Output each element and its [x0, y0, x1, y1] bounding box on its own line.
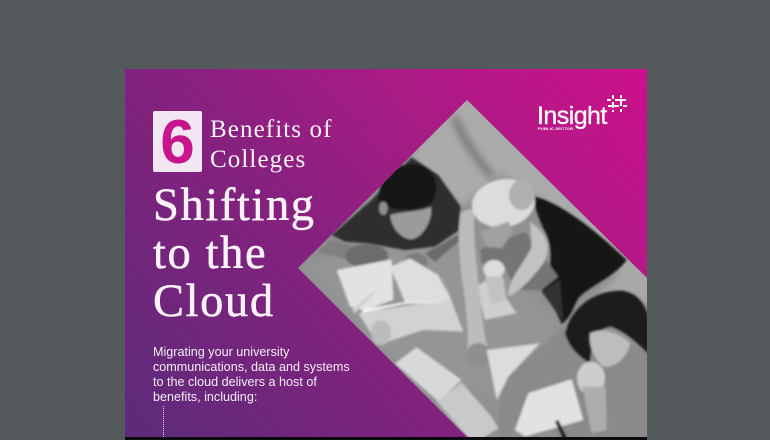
blonde woman's arm — [459, 209, 490, 357]
number badge — [153, 111, 202, 172]
lower woman's hair — [565, 291, 650, 363]
heading: Benefits of Colleges: Benefits of — [210, 116, 332, 143]
lower woman's face — [590, 331, 630, 367]
title: Shifting to the Cloud: Cloud — [153, 276, 275, 327]
panel: purple gradient card — [125, 69, 647, 437]
man's hair — [378, 164, 436, 210]
logo mark — [607, 95, 627, 112]
open books — [337, 259, 393, 311]
title: Shifting to the Cloud — [153, 180, 316, 327]
intro text: to the cloud delivers a host of — [153, 375, 317, 389]
intro text: benefits, including: — [153, 390, 257, 404]
heading: Benefits of Colleges: Colleges — [210, 146, 306, 173]
small notebook — [477, 277, 517, 320]
blonde woman's blouse — [480, 232, 558, 290]
floor — [409, 100, 644, 276]
dotted connector line — [163, 406, 164, 437]
man's shirt — [332, 157, 461, 250]
table — [385, 179, 616, 250]
numeral 6: 6 — [160, 108, 195, 177]
title: Shifting to the Cloud: Shifting — [153, 180, 316, 231]
man's face — [390, 207, 431, 239]
lower woman's sweater — [498, 327, 655, 440]
blonde woman's face — [480, 222, 513, 248]
blonde woman's hand — [483, 260, 505, 279]
logo: Insight Public Sector — [537, 95, 627, 131]
photo: students studying in diamond crop — [298, 100, 647, 437]
man's arms and hands — [318, 240, 351, 259]
heading: Benefits of Colleges — [210, 116, 332, 173]
woman's dark top — [535, 197, 627, 324]
title: Shifting to the Cloud: to the — [153, 228, 267, 279]
logo sub-label: PUBLIC SECTOR — [538, 126, 573, 131]
intro text: Migrating your university — [153, 345, 289, 359]
lower woman's hand and forearm — [577, 362, 605, 395]
page beneath lower woman — [487, 343, 540, 400]
intro text — [153, 345, 350, 404]
pen — [555, 420, 568, 440]
black strip below card — [125, 437, 647, 440]
intro text: communications, data and systems — [153, 360, 350, 374]
blonde hair — [470, 178, 537, 228]
book near lower woman — [515, 379, 583, 437]
logo wordmark: Insight — [537, 102, 607, 130]
